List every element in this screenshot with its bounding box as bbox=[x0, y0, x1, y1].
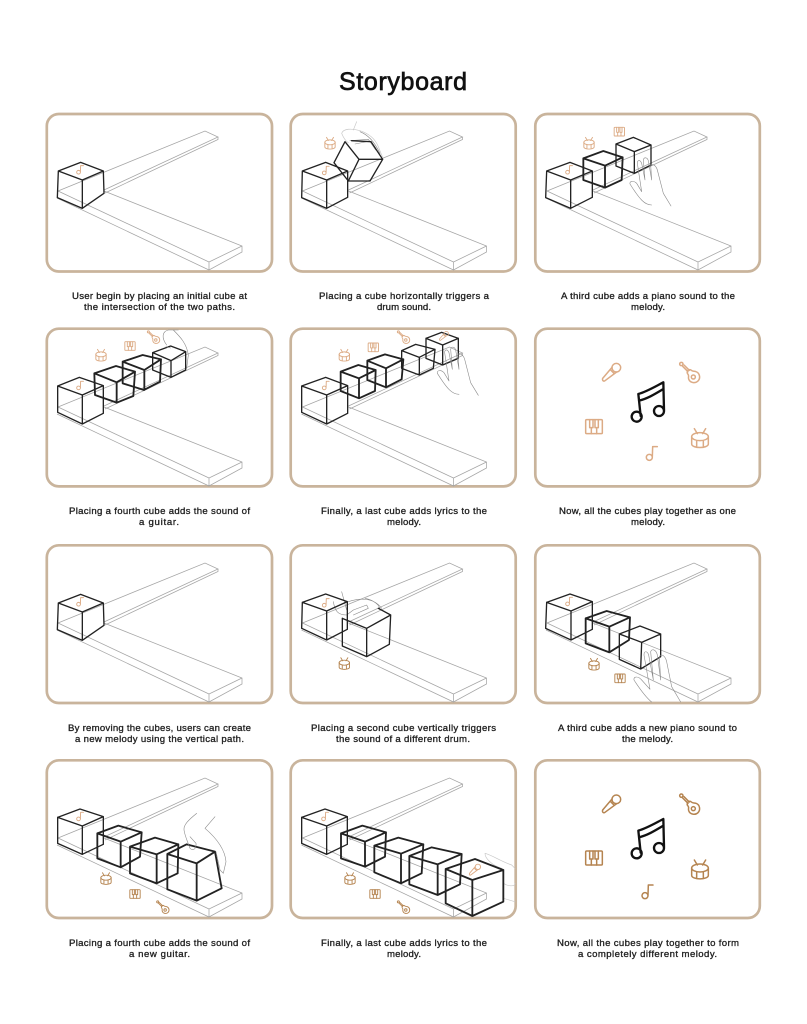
caption 11: Finally, a last cube adds lyrics to the bbox=[321, 938, 487, 949]
icon: piano bbox=[615, 674, 625, 683]
panel 2: drum cube bbox=[291, 114, 516, 272]
icon: note bbox=[77, 381, 84, 390]
caption 6: melody. bbox=[631, 517, 665, 528]
caption 9: A third cube adds a new piano sound to bbox=[558, 723, 737, 734]
caption 12 bbox=[557, 938, 739, 960]
icon: piano bbox=[370, 890, 380, 898]
icon: guitar bbox=[680, 794, 700, 814]
caption 7: a new melody using the vertical path. bbox=[75, 734, 244, 745]
cube 5 bbox=[426, 332, 458, 365]
icon: note bbox=[77, 598, 84, 606]
cube 1 bbox=[546, 162, 592, 208]
icon: note bbox=[77, 812, 84, 821]
icon: drum bbox=[589, 658, 599, 670]
caption 4 bbox=[69, 506, 250, 528]
icon: note bbox=[566, 166, 573, 174]
cube 4 bbox=[153, 346, 186, 377]
panel 4: guitar cube bbox=[47, 329, 272, 486]
panel 1: initial cube bbox=[47, 114, 272, 272]
cube 4 bbox=[409, 847, 462, 895]
cube 3 bbox=[374, 838, 423, 883]
icon: guitar bbox=[680, 362, 700, 383]
cube 5 bbox=[446, 859, 503, 916]
cube 1 bbox=[57, 162, 104, 208]
hand bbox=[630, 158, 671, 206]
icon: drum bbox=[584, 137, 594, 149]
cube 3 bbox=[367, 354, 403, 387]
cube 1 bbox=[302, 809, 347, 854]
caption 2: drum sound. bbox=[377, 302, 431, 313]
hand bbox=[485, 853, 515, 902]
icon: drum bbox=[96, 349, 106, 361]
cube 2 bbox=[97, 826, 142, 867]
hand bbox=[184, 813, 226, 873]
caption 2: Placing a cube horizontally triggers a bbox=[319, 291, 490, 302]
caption 4: a guitar. bbox=[139, 517, 179, 528]
caption 11: melody. bbox=[387, 949, 421, 960]
caption 8: Placing a second cube vertically triggers bbox=[311, 723, 496, 734]
icon: drum bbox=[692, 860, 708, 879]
panel 12: new melody together bbox=[535, 760, 760, 918]
caption 6: Now, all the cubes play together as one bbox=[559, 506, 736, 517]
icon: drum bbox=[339, 349, 349, 361]
cube 1 bbox=[302, 377, 348, 424]
icon: drum bbox=[101, 873, 111, 884]
icon: note bbox=[322, 381, 329, 390]
cube 1 bbox=[57, 594, 104, 640]
icon: microphone bbox=[439, 331, 448, 340]
icon: note bbox=[642, 885, 653, 899]
icon: piano bbox=[586, 851, 602, 865]
cube 1 bbox=[58, 809, 103, 854]
caption 1: User begin by placing an initial cube at bbox=[72, 291, 247, 302]
panel 3: piano cube bbox=[535, 114, 760, 272]
cube 1 bbox=[302, 162, 348, 208]
caption 12: Now, all the cubes play together to form bbox=[557, 938, 739, 949]
caption 9 bbox=[558, 723, 737, 745]
icon: piano bbox=[614, 127, 624, 136]
icon: piano bbox=[125, 342, 135, 350]
hand detail bbox=[350, 132, 380, 153]
icon: big music note bbox=[632, 819, 664, 858]
caption 1: the intersection of the two paths. bbox=[84, 302, 235, 313]
caption 8 bbox=[311, 723, 496, 745]
hand bbox=[342, 122, 382, 157]
cube 3 bbox=[619, 626, 661, 669]
panel 11: vertical lyrics cube bbox=[291, 760, 516, 918]
cube 2 bbox=[342, 608, 391, 657]
icon: piano bbox=[586, 420, 602, 434]
caption 6 bbox=[559, 506, 736, 528]
cube 1 bbox=[546, 594, 592, 640]
caption 10 bbox=[69, 938, 250, 960]
icon: note bbox=[322, 166, 329, 175]
tilted cube bbox=[334, 141, 383, 181]
icon: note bbox=[77, 166, 84, 174]
icon: note bbox=[322, 812, 329, 821]
icon: note bbox=[646, 447, 657, 460]
icon: microphone bbox=[603, 795, 621, 813]
icon: microphone bbox=[469, 864, 481, 875]
cube 3 bbox=[123, 355, 161, 390]
cube 1 bbox=[302, 594, 347, 640]
icon: drum bbox=[692, 429, 708, 447]
cube 2 bbox=[94, 366, 135, 403]
caption 1 bbox=[72, 291, 247, 313]
icon: piano bbox=[130, 890, 140, 898]
hand bbox=[634, 650, 681, 702]
cube 2 bbox=[583, 151, 623, 188]
panel 5: lyrics cube bbox=[291, 329, 516, 486]
icon: microphone bbox=[603, 363, 621, 381]
caption 10: Placing a fourth cube adds the sound of bbox=[69, 938, 250, 949]
icon: drum bbox=[325, 137, 335, 149]
cube 3 bbox=[616, 137, 651, 173]
caption 5: melody. bbox=[387, 517, 421, 528]
caption 10: a new guitar. bbox=[129, 949, 190, 960]
panel 8: vertical drum cube bbox=[291, 545, 516, 703]
icon: big music note bbox=[632, 382, 664, 422]
icon: drum bbox=[339, 658, 349, 669]
hand bbox=[163, 330, 188, 368]
panel 6: all cubes play bbox=[535, 329, 760, 486]
caption 11 bbox=[321, 938, 487, 960]
hand bbox=[437, 347, 478, 395]
icon: guitar bbox=[397, 901, 410, 913]
caption 3 bbox=[561, 291, 735, 313]
caption 4: Placing a fourth cube adds the sound of bbox=[69, 506, 250, 517]
caption 9: the melody. bbox=[622, 734, 673, 745]
caption 2 bbox=[319, 291, 490, 313]
panel 7: cubes removed bbox=[47, 545, 272, 703]
hand bbox=[333, 592, 382, 615]
icon: guitar bbox=[157, 901, 169, 913]
panel 10: vertical guitar cube bbox=[47, 760, 272, 918]
panel 9: vertical piano cube bbox=[535, 545, 760, 703]
cube 1 bbox=[58, 377, 103, 424]
caption 3: A third cube adds a piano sound to the bbox=[561, 291, 735, 302]
cube 2 bbox=[586, 611, 630, 652]
cube 2 bbox=[341, 365, 376, 398]
caption 3: melody. bbox=[631, 302, 665, 313]
caption 5: Finally, a last cube adds lyrics to the bbox=[321, 506, 487, 517]
icon: note bbox=[322, 599, 329, 607]
caption 7 bbox=[68, 723, 251, 745]
icon: note bbox=[566, 597, 573, 606]
icon: guitar bbox=[397, 331, 410, 343]
caption 5 bbox=[321, 506, 487, 528]
title: Storyboard bbox=[339, 68, 467, 96]
cube 4 bbox=[167, 844, 222, 901]
caption 8: the sound of a different drum. bbox=[336, 734, 470, 745]
cube 4 bbox=[402, 344, 435, 375]
cube 2 bbox=[341, 826, 386, 867]
icon: drum bbox=[345, 873, 355, 884]
icon: guitar bbox=[147, 331, 160, 343]
cube 3 bbox=[130, 838, 178, 883]
caption 12: a completely different melody. bbox=[578, 949, 717, 960]
icon: piano bbox=[368, 343, 378, 352]
caption 7: By removing the cubes, users can create bbox=[68, 723, 251, 734]
